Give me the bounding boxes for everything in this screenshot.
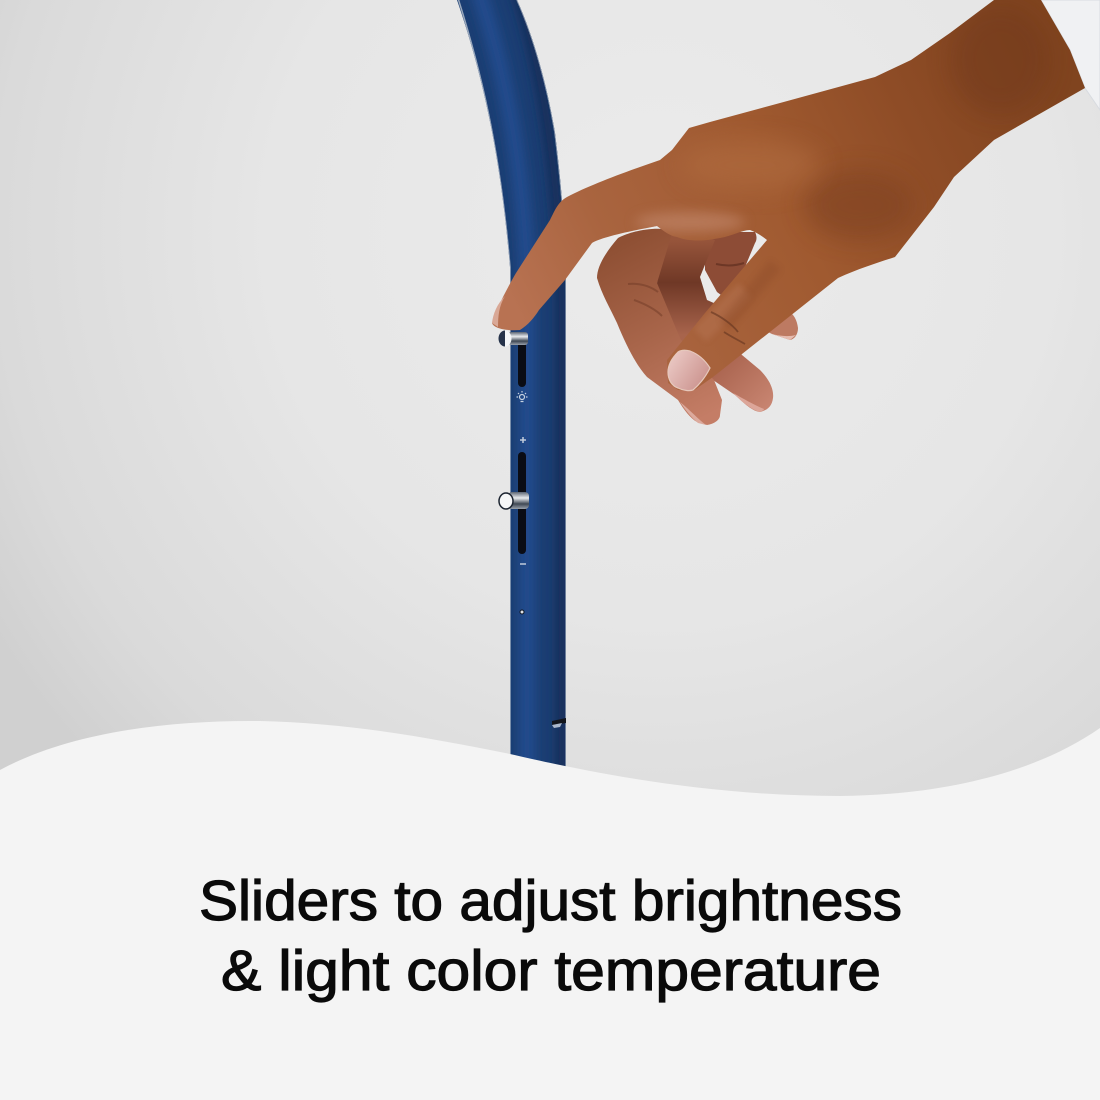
hand shading (635, 5, 1050, 335)
white wave panel (0, 721, 1100, 1100)
caption line 2: & light color temperature (221, 939, 881, 1003)
middle finger (695, 335, 773, 412)
color temperature slider (499, 437, 529, 614)
ring fingernail (772, 334, 796, 340)
small pinhole (520, 610, 524, 614)
plus sign (520, 437, 526, 443)
slider slot: temperature (518, 452, 526, 554)
index fingernail (492, 296, 505, 327)
icon: light bulb (516, 391, 528, 402)
caption line 1: Sliders to adjust brightness (199, 869, 902, 933)
back of hand, index finger and thumb (492, 0, 1085, 391)
slider knob: brightness (498, 330, 528, 346)
fingernail of first finger (680, 402, 706, 425)
sleeve (1041, 0, 1100, 110)
thumb nail (668, 350, 710, 391)
knuckle crease on first finger (628, 284, 662, 316)
crease on third finger (716, 263, 744, 265)
caption (199, 869, 902, 1003)
slider knob: temperature (499, 492, 529, 509)
brightness slider (498, 330, 528, 402)
thumb knuckle creases (711, 312, 745, 344)
slider slot: brightness (518, 340, 526, 387)
ring finger (745, 285, 798, 340)
middle fingernail (733, 393, 764, 412)
hand (492, 0, 1100, 425)
second finger (657, 228, 716, 348)
third finger (705, 232, 756, 298)
lamp pole (457, 0, 566, 780)
minus sign (520, 563, 526, 565)
lower notch on pole (552, 718, 566, 728)
first curled finger (597, 229, 722, 425)
